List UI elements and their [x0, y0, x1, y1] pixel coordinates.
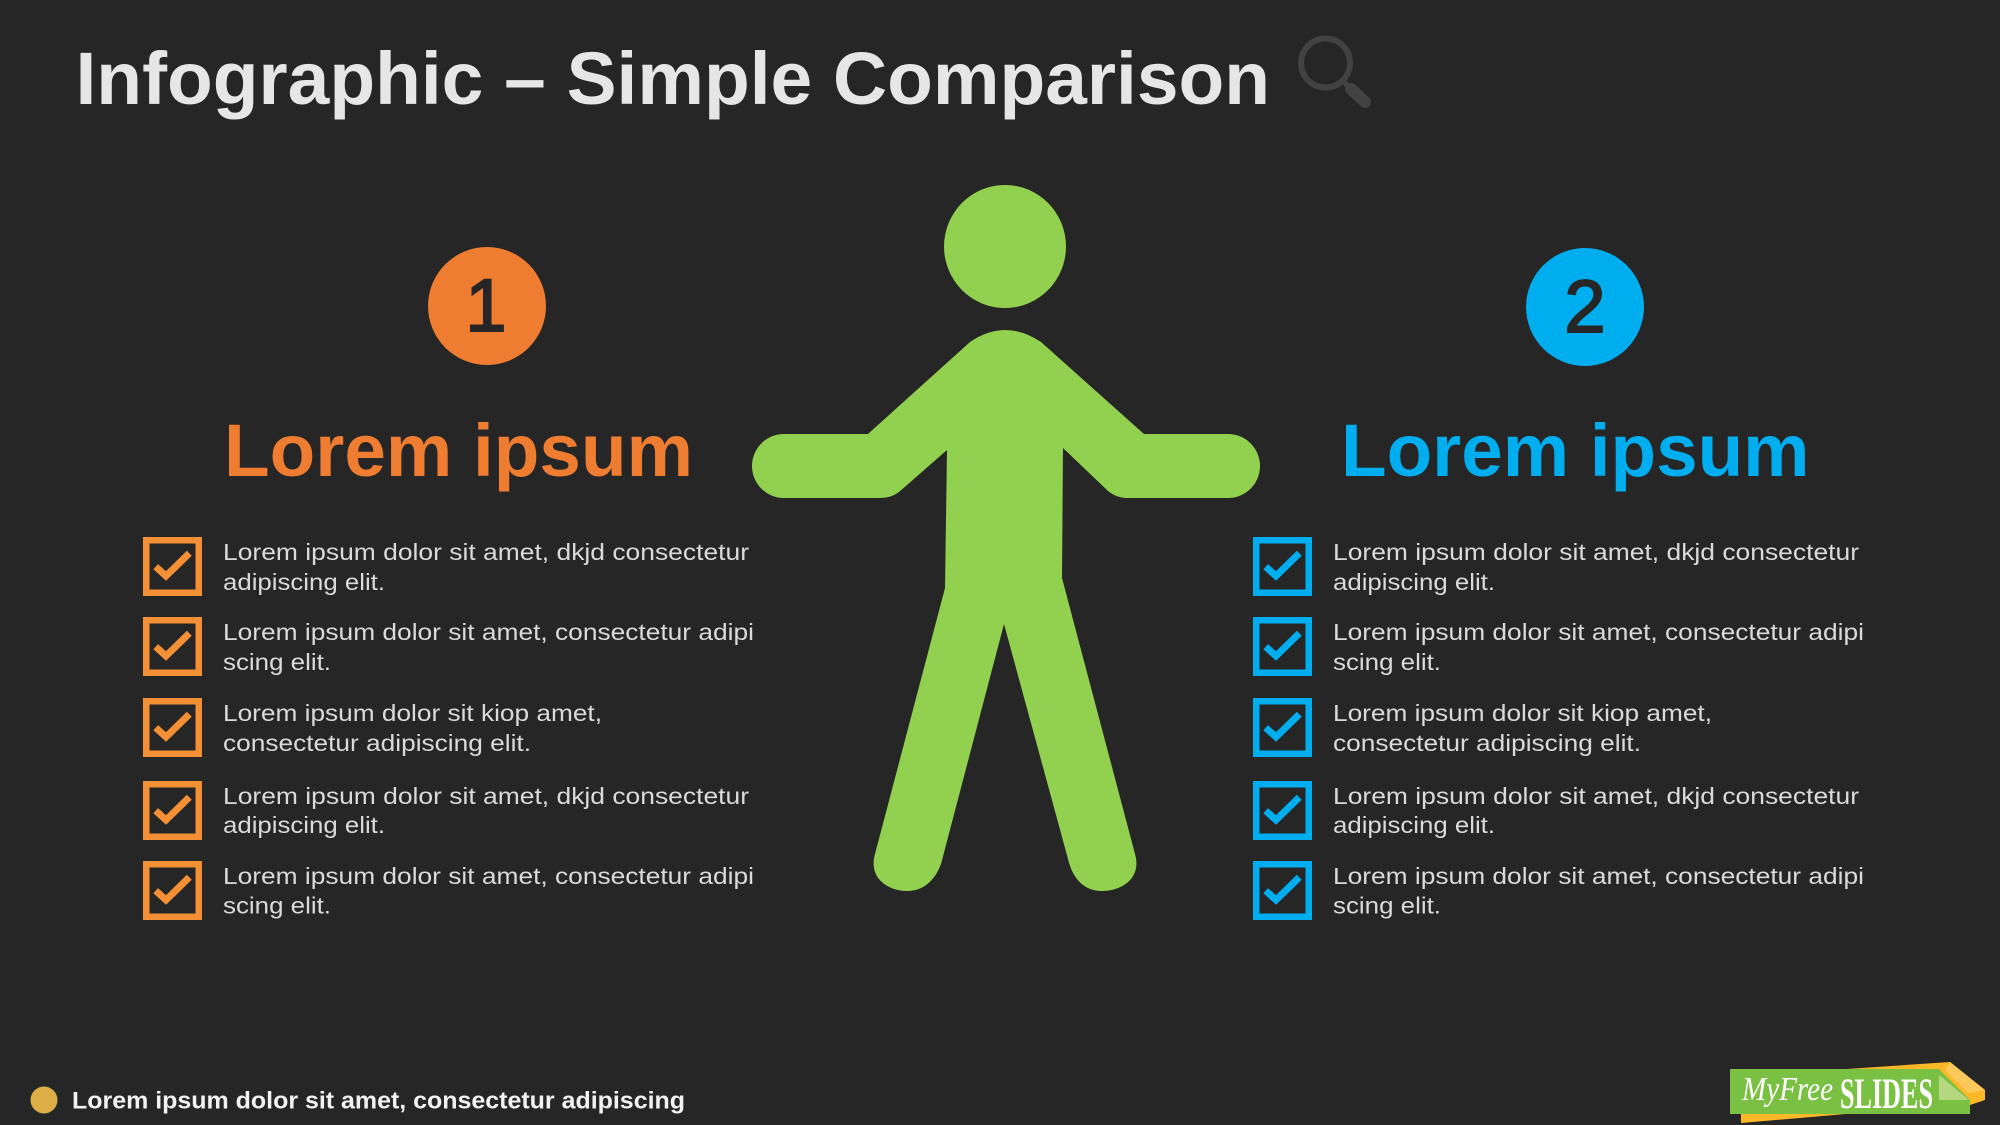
list item 3 left: consectetur adipiscing elit.	[223, 730, 531, 756]
list item 4 right	[1256, 783, 1859, 838]
list item 2 right: Lorem ipsum dolor sit amet, consectetur adipi	[1333, 619, 1864, 645]
list item 4 right: adipiscing elit.	[1333, 812, 1495, 838]
list item 1 left	[146, 539, 749, 595]
list item 1 left: adipiscing elit.	[223, 569, 385, 595]
list item 5 left: Lorem ipsum dolor sit amet, consectetur adipi	[223, 863, 754, 889]
list item 4 left	[146, 783, 749, 838]
list item 3 right	[1256, 700, 1712, 756]
list item 2 left	[146, 619, 754, 675]
list item 2 left: Lorem ipsum dolor sit amet, consectetur adipi	[223, 619, 754, 645]
list item 1 right	[1256, 539, 1859, 595]
list item 1 left: Lorem ipsum dolor sit amet, dkjd consectetur	[223, 539, 749, 565]
list item 3 right: consectetur adipiscing elit.	[1333, 730, 1641, 756]
list item 3 left	[146, 700, 602, 756]
list item 3 left: Lorem ipsum dolor sit kiop amet,	[223, 700, 602, 726]
number badge 1: 1	[465, 264, 507, 347]
list item 5 right	[1256, 863, 1864, 918]
list item 2 right: scing elit.	[1333, 649, 1441, 675]
list item 5 right: scing elit.	[1333, 892, 1441, 918]
panel: right column	[1256, 248, 1864, 918]
logo: MyFree Slides	[1730, 1062, 1985, 1123]
list item 2 left: scing elit.	[223, 649, 331, 675]
logo: MyFree Slides: MyFree	[1741, 1071, 1833, 1108]
list item 5 left: scing elit.	[223, 892, 331, 918]
number badge 2	[1526, 248, 1644, 366]
footer note: Lorem ipsum dolor sit amet, consectetur adipiscing	[72, 1088, 685, 1114]
panel: left column	[146, 247, 754, 918]
heading: left: Lorem ipsum	[224, 409, 693, 492]
list item 4 left: Lorem ipsum dolor sit amet, dkjd consectetur	[223, 783, 749, 809]
list item 4 right: Lorem ipsum dolor sit amet, dkjd consectetur	[1333, 783, 1859, 809]
icon: magnifying glass	[1301, 38, 1365, 102]
list item 5 right: Lorem ipsum dolor sit amet, consectetur adipi	[1333, 863, 1864, 889]
number badge 1	[428, 247, 546, 365]
logo: MyFree Slides: SLIDES	[1840, 1071, 1933, 1118]
number badge 2: 2	[1564, 265, 1606, 348]
title: Infographic – Simple Comparison	[76, 37, 1270, 120]
list item 2 right	[1256, 619, 1864, 675]
list item 1 right: Lorem ipsum dolor sit amet, dkjd consectetur	[1333, 539, 1859, 565]
list item 3 right: Lorem ipsum dolor sit kiop amet,	[1333, 700, 1712, 726]
list item 4 left: adipiscing elit.	[223, 812, 385, 838]
list item 5 left	[146, 863, 754, 918]
list item 1 right: adipiscing elit.	[1333, 569, 1495, 595]
heading: right: Lorem ipsum	[1341, 409, 1810, 492]
icon: green person	[752, 185, 1260, 891]
